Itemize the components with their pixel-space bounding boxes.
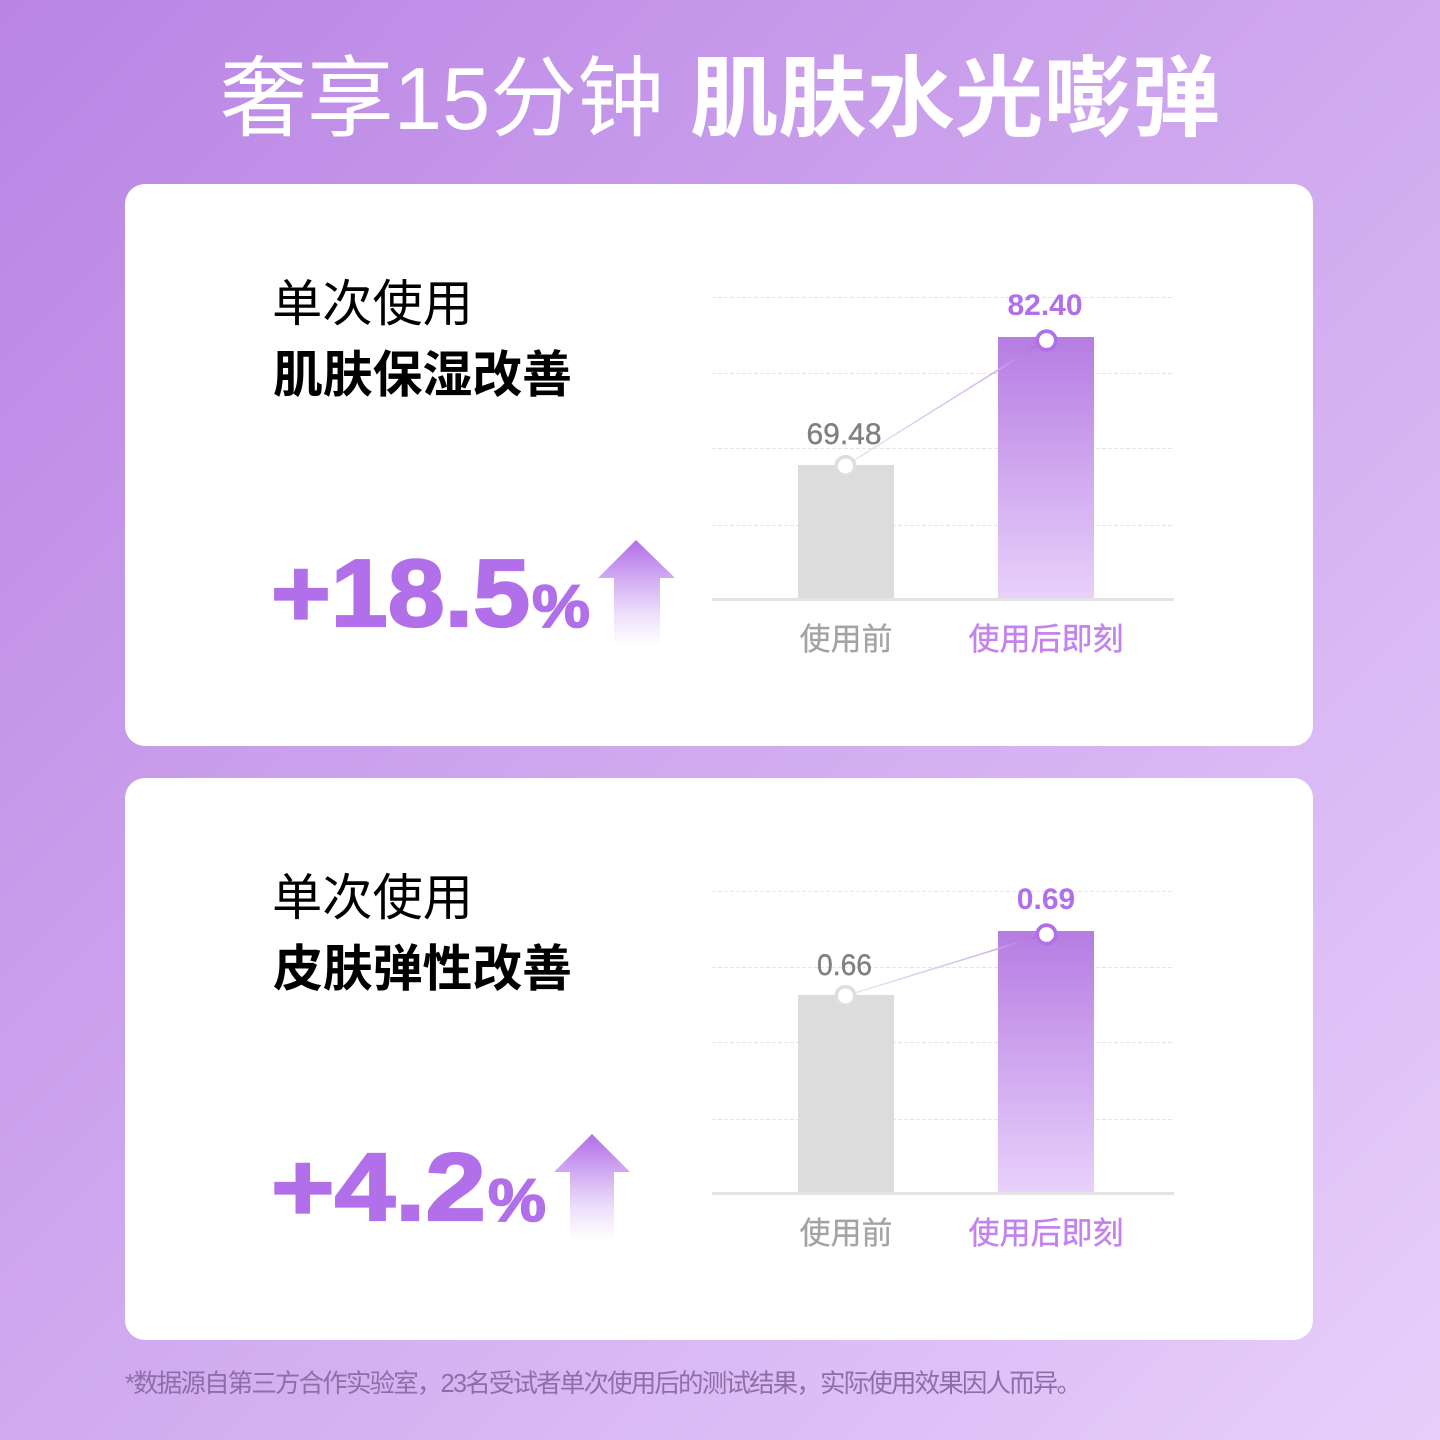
panel: skin elasticity [125,778,1313,1340]
bar: after [998,931,1094,1193]
bar chart: hydration [712,289,1174,657]
icon: up arrow [554,1134,630,1240]
stat: +18.5%: % [532,573,590,640]
marker: before [836,457,855,475]
bar: before [798,995,894,1193]
heading: hydration: 肌肤保湿改善 [273,347,572,403]
panel: skin hydration [125,184,1313,746]
heading: hydration: 单次使用 [272,276,473,332]
stat: +4.2%: % [488,1167,546,1234]
value: 0.69: 0.69 [1017,883,1075,916]
label: after: 使用后即刻 [968,622,1124,657]
trend line [845,934,1046,996]
stat: +4.2% [271,1134,546,1241]
heading: hydration [272,276,572,403]
marker: after [1037,331,1056,350]
marker: before [836,987,855,1005]
stat: +18.5%: +18.5 [271,540,530,647]
bar: after [998,337,1094,599]
marker: after [1037,925,1056,944]
bar: before [798,465,894,599]
trend line [845,340,1046,466]
title: 肌肤水光嘭弹 [690,49,1220,148]
title [220,49,1220,148]
footnote: *数据源自第三方合作实验室，23名受试者单次使用后的测试结果，实际使用效果因人而异。 [125,1370,1082,1398]
label: after: 使用后即刻 [968,1216,1124,1251]
bar chart: elasticity [712,883,1174,1251]
title: 奢享15分钟 [220,49,664,148]
heading: elasticity: 单次使用 [272,870,473,926]
label: before: 使用前 [800,1216,892,1251]
value: 82.40: 82.40 [1007,289,1083,322]
stat: +4.2%: +4.2 [271,1134,486,1241]
icon: up arrow [598,540,675,646]
value: 69.48: 69.48 [806,418,882,451]
heading: elasticity [272,870,572,997]
value: 0.66: 0.66 [817,949,872,982]
label: before: 使用前 [800,622,892,657]
heading: elasticity: 皮肤弹性改善 [273,941,572,997]
